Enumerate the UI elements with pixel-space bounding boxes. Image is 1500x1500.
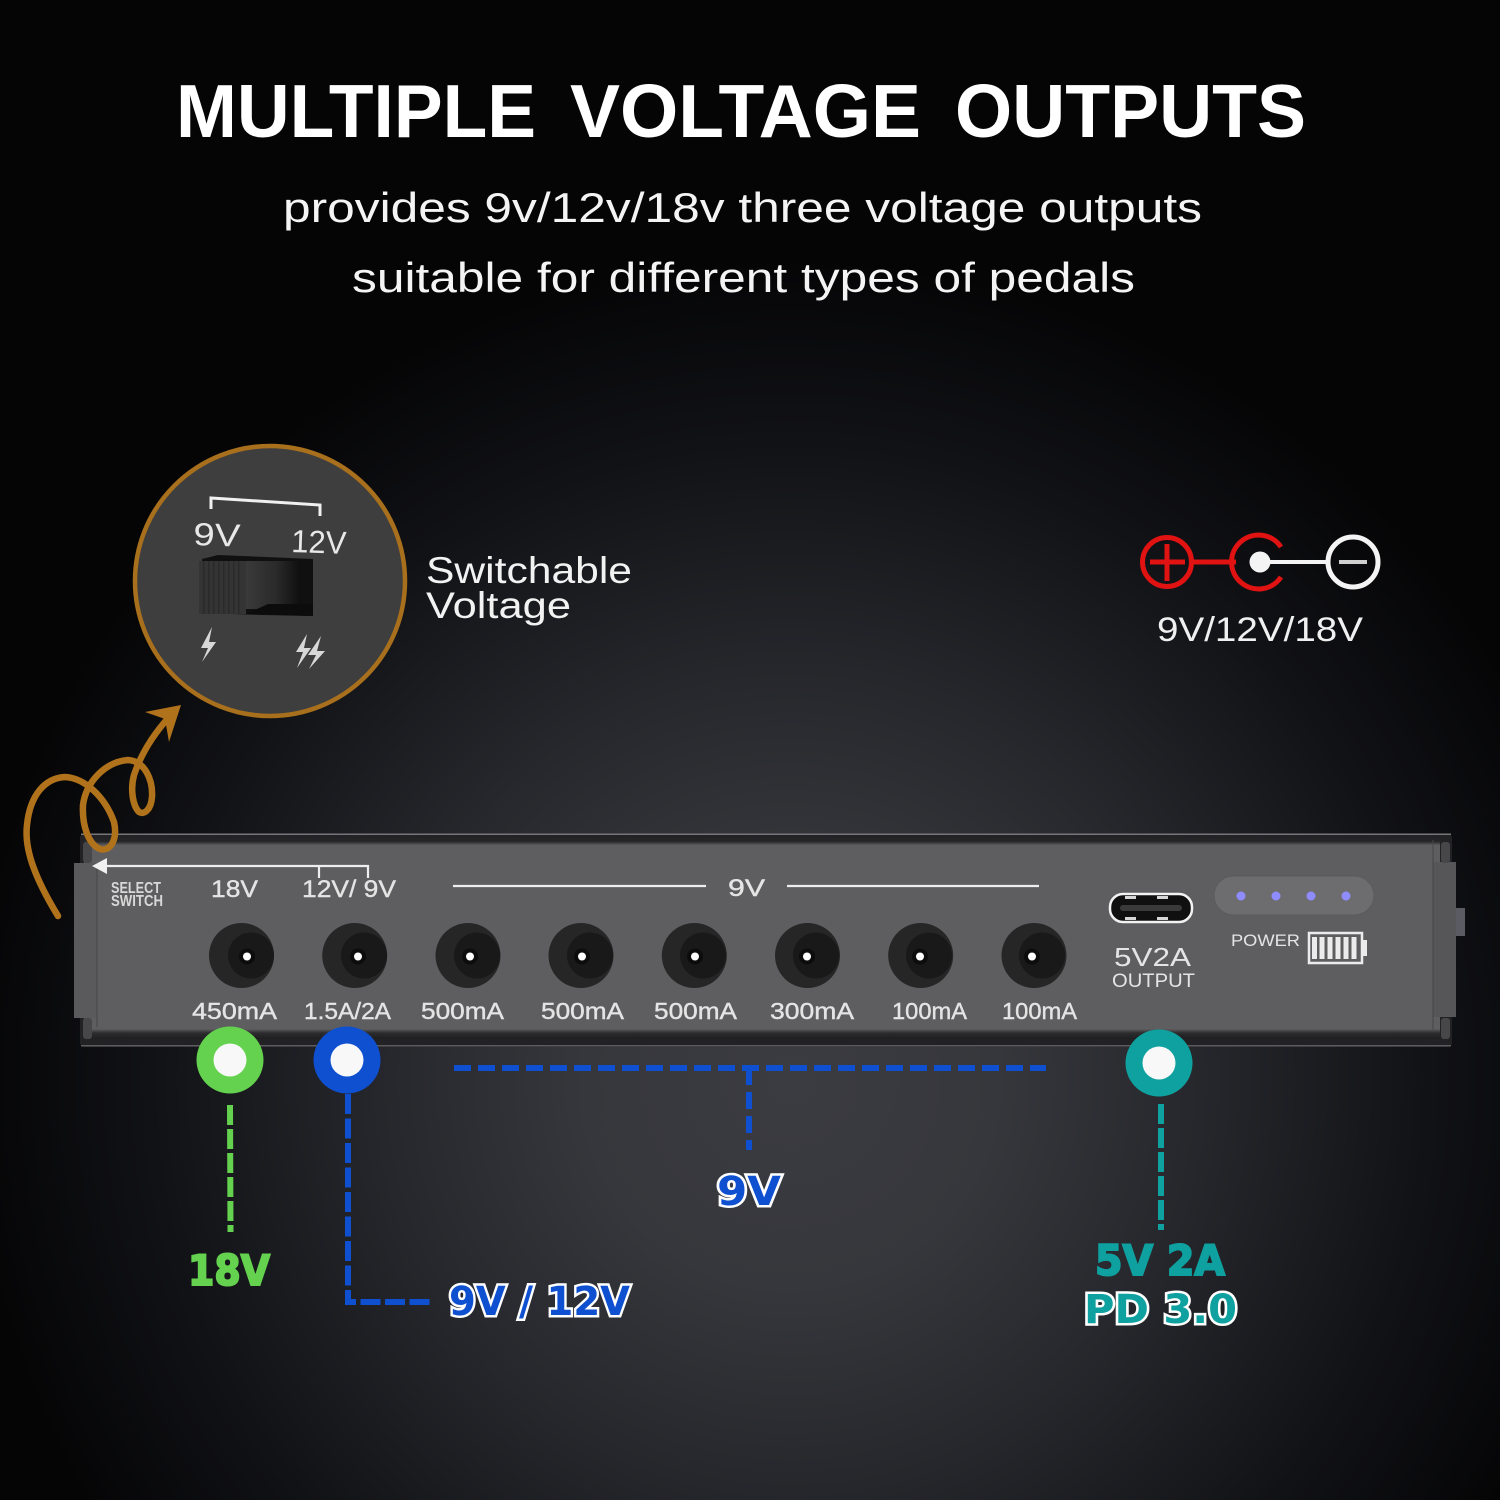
- icon: single lightning bolt: [201, 627, 216, 662]
- text: switchable voltage: [426, 550, 632, 626]
- label: polarity voltages: 9V/12V/18V: [1157, 611, 1363, 649]
- title: MULTIPLE: [176, 69, 536, 153]
- DC jacks: [209, 923, 1066, 988]
- label: 9V: 9V: [717, 1169, 781, 1215]
- labels: current ratings: 100mA: [892, 998, 968, 1024]
- labels: top voltages: 9V: [728, 875, 765, 902]
- label: 9V: 9V: [193, 516, 242, 554]
- label: select switch: [111, 880, 163, 910]
- subtitle: suitable for different types of pedals: [352, 254, 1135, 301]
- labels: top voltages: 12V/ 9V: [302, 876, 396, 903]
- connector: 9V bracket: [454, 1068, 1046, 1150]
- label: select switch: SWITCH: [111, 893, 163, 910]
- connector: 5V: [1158, 1104, 1164, 1230]
- labels: current ratings: 500mA: [541, 998, 625, 1024]
- label: 12V: 12V: [291, 523, 348, 561]
- labels: top voltages: 18V: [211, 876, 258, 903]
- label: 5V 2A: 5V 2A: [1095, 1236, 1225, 1285]
- labels: current ratings: [192, 998, 1078, 1024]
- title: [176, 69, 1306, 153]
- label: 5V2A output: OUTPUT: [1112, 971, 1195, 992]
- marker: 18V green: [196, 1026, 264, 1094]
- power indicator LEDs: [1214, 876, 1374, 915]
- icon: slide switch: [199, 555, 313, 616]
- callout: switchable voltage magnifier: [135, 446, 405, 716]
- text: switchable voltage: Voltage: [426, 585, 571, 626]
- marker: 9V/12V blue: [314, 1026, 380, 1094]
- subtitle: provides 9v/12v/18v three voltage outputs: [283, 184, 1202, 231]
- subtitle: [283, 184, 1202, 301]
- labels: current ratings: 500mA: [421, 998, 505, 1024]
- icon: battery: [1309, 933, 1367, 963]
- labels: current ratings: 450mA: [192, 998, 278, 1024]
- icon: double lightning bolt: [296, 634, 325, 669]
- label: 9V / 12V: 9V / 12V: [449, 1279, 630, 1325]
- label: select switch: SELECT: [111, 880, 161, 897]
- marker: 5V teal: [1126, 1030, 1192, 1096]
- label: PD 3.0: PD 3.0: [1084, 1287, 1237, 1333]
- labels: current ratings: 500mA: [654, 998, 738, 1024]
- connector: 18V: [227, 1105, 234, 1232]
- title: VOLTAGE: [570, 69, 921, 153]
- connector: 9V/12V: [348, 1094, 430, 1302]
- labels: current ratings: 1.5A/2A: [304, 998, 392, 1024]
- power supply device: [74, 834, 1465, 1047]
- USB-C port: [1110, 894, 1192, 922]
- label: 5V2A output: [1112, 942, 1195, 992]
- arrow: curly orange arrow: [27, 705, 181, 916]
- label: 18V: 18V: [188, 1246, 270, 1295]
- title: OUTPUTS: [955, 69, 1306, 153]
- select switch arrow: [92, 858, 368, 878]
- polarity symbol: [1142, 535, 1378, 589]
- icon: selector bracket: [211, 498, 320, 516]
- text: switchable voltage: Switchable: [426, 550, 632, 591]
- label: 5V2A output: 5V2A: [1114, 942, 1192, 972]
- labels: current ratings: 100mA: [1002, 998, 1078, 1024]
- labels: top voltages: [211, 875, 765, 903]
- 9V bracket lines: [453, 885, 1039, 887]
- label: power: POWER: [1231, 931, 1300, 950]
- labels: current ratings: 300mA: [770, 998, 855, 1024]
- device body: [74, 834, 1465, 1047]
